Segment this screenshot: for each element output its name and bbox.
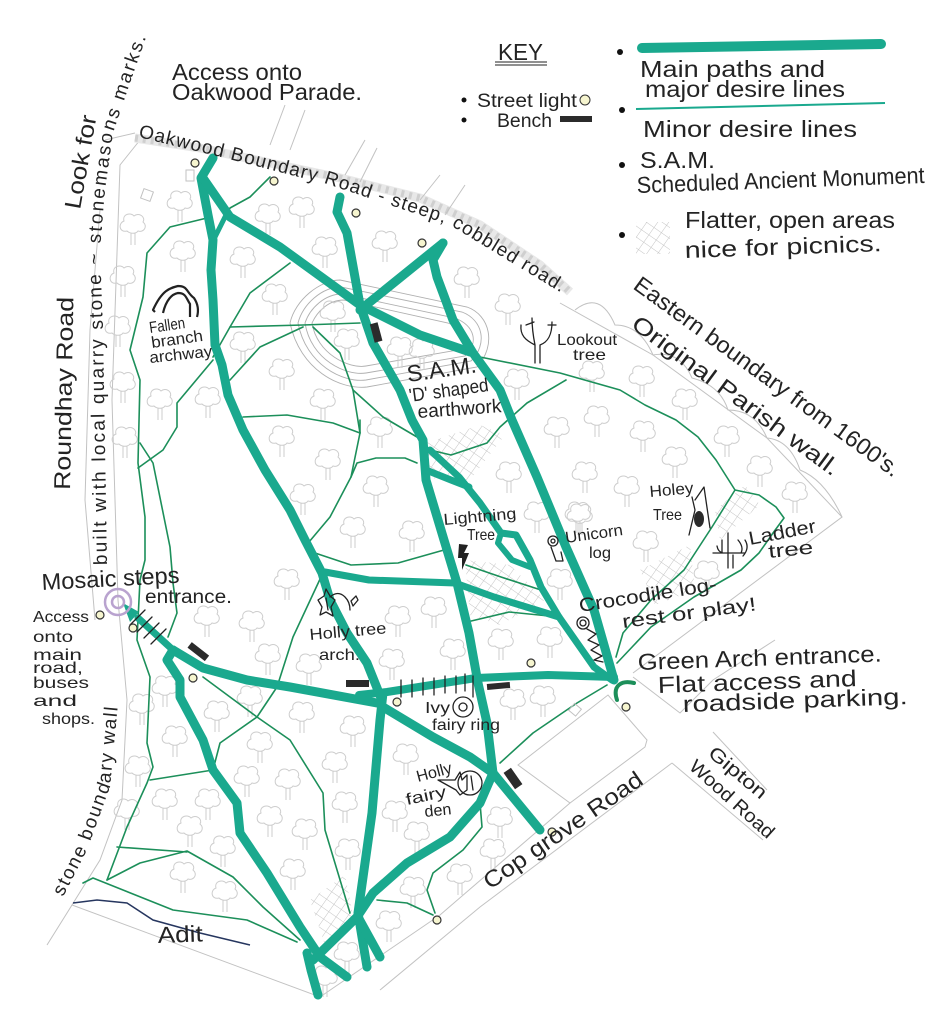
label: lookout tree: Lookout: [557, 332, 618, 349]
label: ivy fairy ring: Ivy: [425, 700, 450, 717]
label: roundhay road: Roundhay Road: [49, 297, 78, 490]
label: unicorn log: Unicorn: [564, 522, 624, 547]
key: flatter open areas: [619, 207, 895, 263]
minor desire lines: [83, 177, 784, 942]
label: green arch entrance: roadside parking.: [682, 683, 908, 717]
label: crocodile log: rest or play!: [621, 594, 757, 633]
label: fallen branch archway: Fallen: [148, 315, 186, 337]
icon: holey tree: [689, 487, 710, 535]
label: crocodile log: Crocodile log-: [577, 574, 718, 617]
label: access onto oakwood parade: Access onto: [172, 59, 302, 85]
steps ticks at mosaic entrance: [130, 610, 166, 644]
label: ivy fairy ring: [425, 700, 500, 734]
label: access onto main road: onto: [33, 629, 73, 646]
key: minor desire lines: Minor desire lines: [643, 116, 857, 142]
label: access onto main road: and: [33, 693, 77, 710]
label: gipton wood road: Wood Road: [685, 756, 778, 843]
icon: ladder tree: [713, 533, 747, 568]
key: scheduled ancient monument: S.A.M.: [640, 147, 715, 173]
icon: fallen branch archway: [153, 286, 198, 317]
label: built with local quarry stone: built with local quarry stone ~ stonemasons marks.: [89, 38, 146, 564]
icon: unicorn log: [548, 536, 563, 561]
label: lightning tree: Tree: [467, 527, 495, 544]
trees: [105, 191, 807, 997]
icon: holly tree arch: [318, 589, 358, 616]
label: green arch entrance: [637, 640, 908, 717]
label: holey tree: Tree: [653, 507, 682, 524]
label: access onto oakwood parade: [172, 59, 362, 105]
label: cop grove road: Cop grove Road: [478, 766, 648, 894]
label: holly fairy den: [404, 760, 454, 821]
label: green arch entrance: Green Arch entrance.: [637, 640, 882, 675]
label: access onto main road: shops.: [42, 711, 95, 728]
label: sam d shaped earthwork: 'D' shaped: [408, 375, 490, 407]
benches: [187, 322, 522, 789]
label: look for: Look for: [59, 112, 101, 211]
label: holly fairy den: Holly: [415, 760, 454, 786]
ivy ring steps ticks: [401, 674, 473, 697]
label: ladder tree: [747, 516, 818, 563]
label: green arch entrance: Flat access and: [657, 665, 857, 698]
label: fallen branch archway: archway: [149, 343, 213, 367]
key: main paths: [617, 44, 881, 102]
key: scheduled ancient monument: [619, 147, 926, 198]
label: adit: Adit: [157, 920, 204, 948]
label: fallen branch archway: branch: [150, 328, 204, 352]
icon: ivy fairy ring: [453, 697, 473, 717]
heading: key: KEY: [498, 39, 543, 65]
key: street light and bench: [462, 91, 592, 132]
label: access onto main road: [33, 609, 95, 728]
label: access onto oakwood parade: Oakwood Parade.: [172, 79, 362, 105]
icon: lightning tree: [458, 544, 469, 570]
label: unicorn log: [564, 522, 624, 562]
D shaped earthwork: [290, 280, 489, 387]
key: minor desire lines: [619, 103, 885, 142]
key: street light and bench: Street light: [477, 91, 578, 112]
label: crocodile log: [577, 574, 757, 633]
label: gipton wood road: Gipton: [704, 743, 771, 804]
adit stream: [73, 900, 250, 945]
label: mosaic steps entrance: [41, 562, 232, 608]
key: main paths: Main paths and: [640, 56, 825, 82]
label: fallen branch archway: [148, 315, 213, 367]
entry gate markers: [141, 170, 581, 716]
label: stone boundary wall: stone boundary wall: [55, 707, 118, 896]
key: main paths: major desire lines: [645, 76, 845, 102]
picnic areas: [310, 425, 760, 945]
icon: green arch entrance: [616, 682, 634, 700]
icon: mosaic steps: [105, 589, 131, 615]
label: lookout tree: tree: [573, 347, 606, 364]
icon: holly fairy den: [438, 771, 482, 795]
label: ivy fairy ring: fairy ring: [432, 717, 500, 734]
label: holly fairy den: den: [424, 801, 452, 821]
label: access onto main road: road,: [33, 660, 83, 677]
label: holly tree arch: Holly tree: [309, 620, 387, 644]
key: street light and bench: Bench: [497, 111, 552, 132]
label: lightning tree: Lightning: [443, 506, 517, 529]
label: sam d shaped earthwork: earthwork: [417, 396, 503, 423]
label: access onto main road: Access: [33, 609, 89, 626]
label: ladder tree: Ladder: [747, 516, 818, 550]
label: lookout tree: [557, 332, 618, 364]
label: holey tree: Holey: [649, 480, 694, 501]
label: access onto main road: main: [33, 647, 82, 664]
main paths and major desire lines: [123, 158, 614, 995]
key: flatter open areas: nice for picnics.: [684, 230, 882, 263]
icon: lookout tree: [521, 318, 556, 363]
label: access onto main road: buses: [33, 675, 89, 692]
label: eastern boundary: Eastern boundary from 1600's.: [629, 271, 906, 482]
key: flatter open areas: Flatter, open areas: [685, 207, 895, 233]
label: mosaic steps entrance: entrance.: [145, 587, 232, 608]
label: holly fairy den: fairy: [404, 784, 448, 809]
label: unicorn log: log: [589, 545, 611, 562]
label: holly tree arch: [309, 620, 387, 664]
label: original parish wall: Original Parish wall.: [627, 310, 845, 481]
label: mosaic steps entrance: Mosaic steps: [41, 562, 180, 595]
label: holly tree arch: arch.: [319, 647, 360, 664]
label: oakwood boundary road: Oakwood Boundary Road - steep, cobbled road.: [140, 126, 562, 292]
label: ladder tree: tree: [767, 537, 814, 563]
park boundary and roads: [47, 105, 842, 997]
label: lightning tree: [443, 506, 517, 544]
icon: crocodile log: [577, 617, 603, 662]
street lights: [96, 159, 630, 924]
label: sam d shaped earthwork: S.A.M.: [405, 351, 478, 387]
label: sam d shaped earthwork: [405, 351, 503, 423]
label: holey tree: [649, 480, 694, 524]
